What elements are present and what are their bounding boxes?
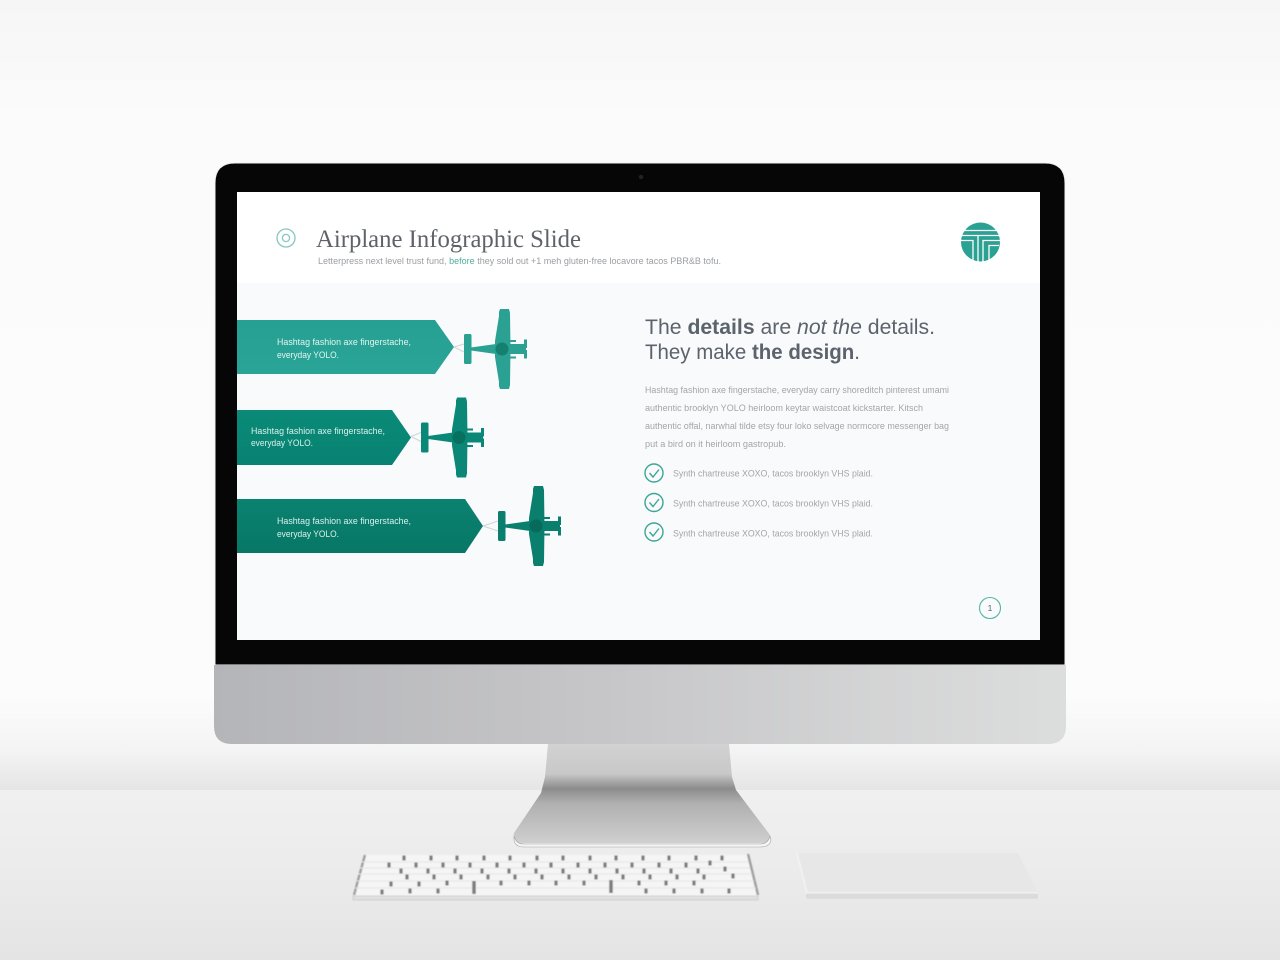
banner 2 arrow [237,410,411,465]
check item 3: Synth chartreuse XOXO, tacos brooklyn VHS plaid. [673,528,873,538]
keyboard edges [354,854,758,895]
airplane 2 [411,398,484,478]
check item 2: Synth chartreuse XOXO, tacos brooklyn VHS plaid. [673,498,873,508]
slide body background [237,283,1040,640]
slide screen [237,192,1040,640]
banner 1 text: Hashtag fashion axe fingerstache, [277,337,411,348]
banner 2 text: everyday YOLO. [251,438,313,449]
page number: 1 [988,603,993,613]
monitor camera [639,175,643,179]
banner 2 text: Hashtag fashion axe fingerstache, [251,426,385,437]
banner 1 arrow [237,320,454,374]
icon: logo [961,222,1000,262]
body paragraph: authentic brooklyn YOLO heirloom keytar waistcoat kickstarter. Kitsch [645,403,923,413]
keyboard spacebar gaps [474,880,611,894]
body paragraph: Hashtag fashion axe fingerstache, everyday carry shoreditch pinterest umami [645,385,949,395]
keyboard front lip [353,896,758,900]
banner 3 arrow [237,499,483,553]
check item 1: Synth chartreuse XOXO, tacos brooklyn VHS plaid. [673,468,873,478]
keyboard [353,854,758,900]
monitor chin [214,665,1066,744]
airplane 3 [483,486,561,566]
background: desk [0,790,1280,960]
trackpad surface [797,853,1038,893]
banner 3 text: Hashtag fashion axe fingerstache, [277,516,411,527]
monitor stand [514,744,770,843]
keyboard body [353,855,758,896]
check item 1 [645,464,873,482]
title: Airplane Infographic Slide [316,226,581,253]
slide header background [237,192,1040,283]
page number [980,598,1000,618]
trackpad [797,853,1038,898]
airplane 1 [454,309,527,389]
body paragraph: authentic offal, narwhal tilde etsy four loko selvage normcore messenger bag [645,421,949,431]
banner 2 [237,410,411,465]
subtitle: Letterpress next level trust fund, before they sold out +1 meh gluten-free locavore tacos PBR&B tofu. [318,256,721,266]
heading: They make the design. [645,341,860,364]
check item 2 [645,494,873,512]
trackpad shadow lip [807,894,1037,898]
banner 1 [237,320,454,374]
body paragraph: put a bird on it heirloom gastropub. [645,439,786,449]
banner 3 [237,499,483,553]
banner 1 text: everyday YOLO. [277,350,339,361]
keyboard row lines [355,862,756,888]
heading: The details are not the details. [645,316,934,339]
checklist [645,464,873,541]
monitor bezel [215,163,1065,665]
monitor [214,163,1066,847]
monitor stand base lip [514,836,771,847]
banner 3 text: everyday YOLO. [277,529,339,540]
icon: target [277,229,295,247]
keyboard key gaps [382,856,733,894]
check item 3 [645,523,873,541]
trackpad highlight [797,853,1038,893]
